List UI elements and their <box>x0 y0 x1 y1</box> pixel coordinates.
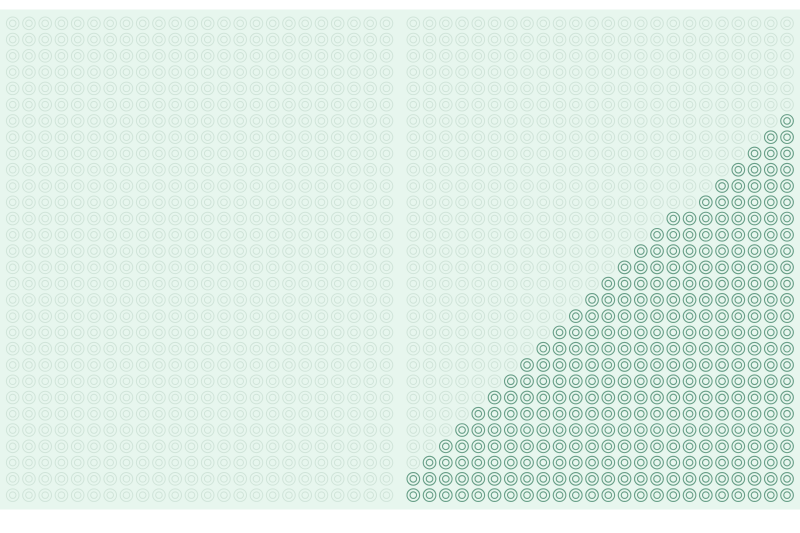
panel: right ring matrix, light rings <box>407 17 793 501</box>
highlighted dark rings: staircase triangle in right matrix <box>406 114 794 502</box>
panel: left ring matrix, all light <box>6 17 393 501</box>
